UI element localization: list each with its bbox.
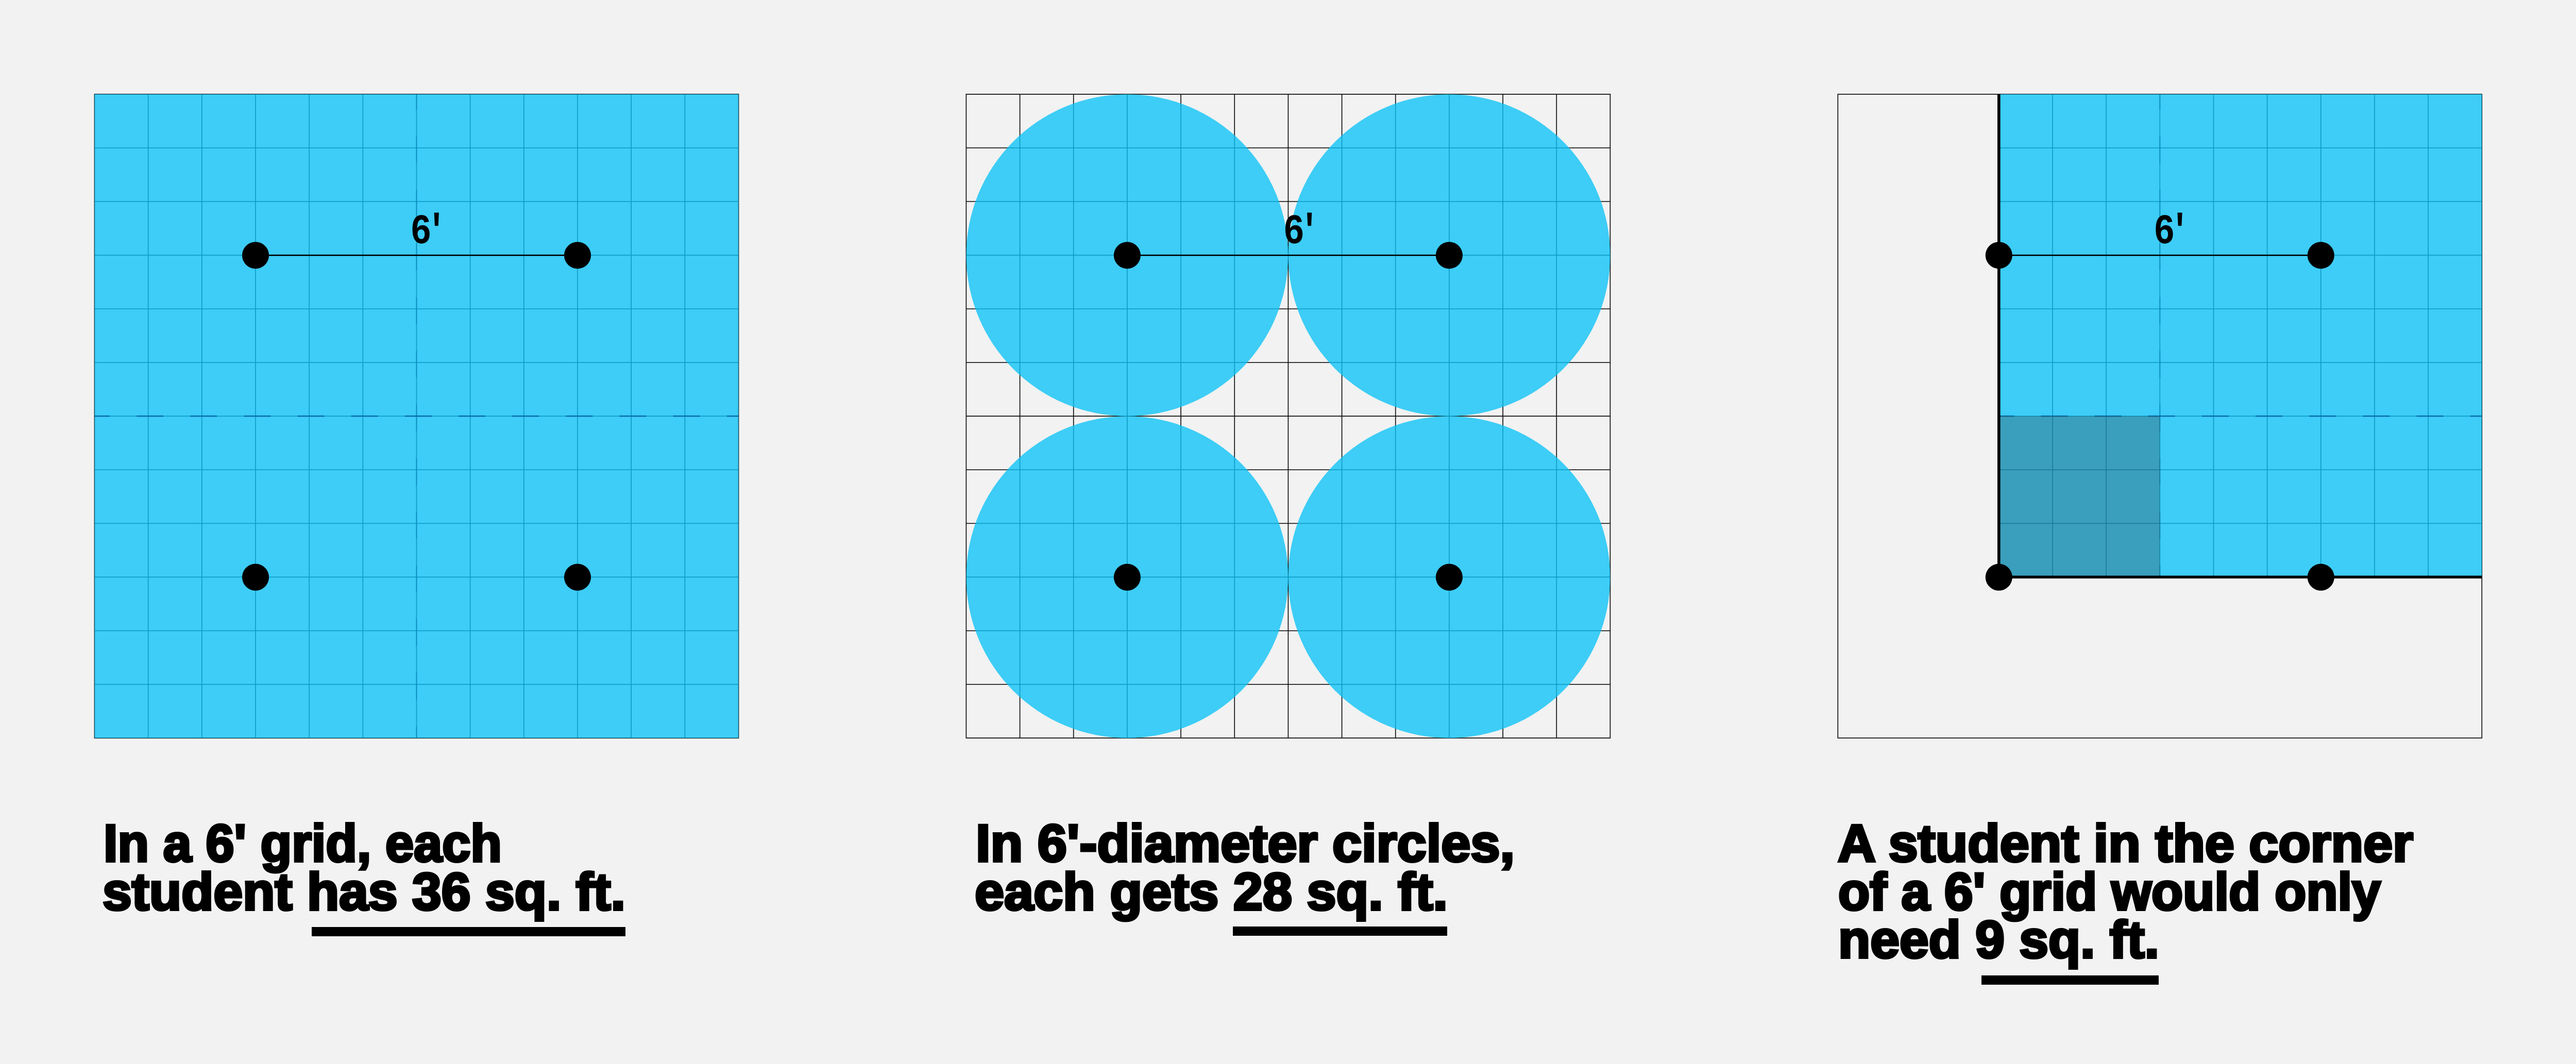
horizontal dashed centre line xyxy=(1999,416,2482,417)
caption line 2: each gets 28 sq. ft. xyxy=(975,862,1448,921)
vertical dashed centre line xyxy=(2159,94,2161,577)
label: 6 feet: 6' xyxy=(1283,208,1320,256)
distance line xyxy=(1127,254,1449,256)
student dots xyxy=(242,242,591,591)
panel: corner student diagram xyxy=(1838,94,2482,738)
label: 6 feet: 6' xyxy=(2154,208,2191,256)
vertical dashed centre line xyxy=(416,94,417,738)
grid lines xyxy=(95,94,739,738)
corner walls xyxy=(1999,94,2482,577)
underline xyxy=(1981,975,2159,985)
caption line 2: of a 6' grid would only xyxy=(1838,862,2381,921)
panel: 6 foot diameter circles diagram xyxy=(966,94,1610,738)
student dots xyxy=(1986,242,2334,591)
underline xyxy=(312,927,625,936)
caption line 3: need 9 sq. ft. xyxy=(1838,911,2159,969)
panel: 6 foot grid diagram xyxy=(95,94,739,738)
caption: 6 foot grid xyxy=(103,814,625,936)
label: 6 feet: 6' xyxy=(410,208,447,256)
blue circles xyxy=(966,94,1610,738)
caption line 1: In a 6' grid, each xyxy=(104,814,502,872)
student dots xyxy=(1114,242,1463,591)
caption: corner student xyxy=(1838,814,2413,985)
grid lines xyxy=(966,94,1610,738)
blue area xyxy=(1999,94,2482,577)
distance line xyxy=(1999,254,2321,256)
caption line 2: student has 36 sq. ft. xyxy=(103,862,625,921)
distance line xyxy=(256,254,578,256)
horizontal dashed centre line xyxy=(95,416,739,417)
dark corner square xyxy=(1999,416,2160,577)
caption line 1: A student in the corner xyxy=(1838,814,2413,872)
underline xyxy=(1233,926,1447,936)
grid lines xyxy=(1999,94,2482,577)
caption: 6 foot circles xyxy=(975,814,1515,936)
caption line 1: In 6'-diameter circles, xyxy=(976,814,1515,872)
blue area per student xyxy=(95,94,739,738)
outer frame xyxy=(1838,94,2482,738)
